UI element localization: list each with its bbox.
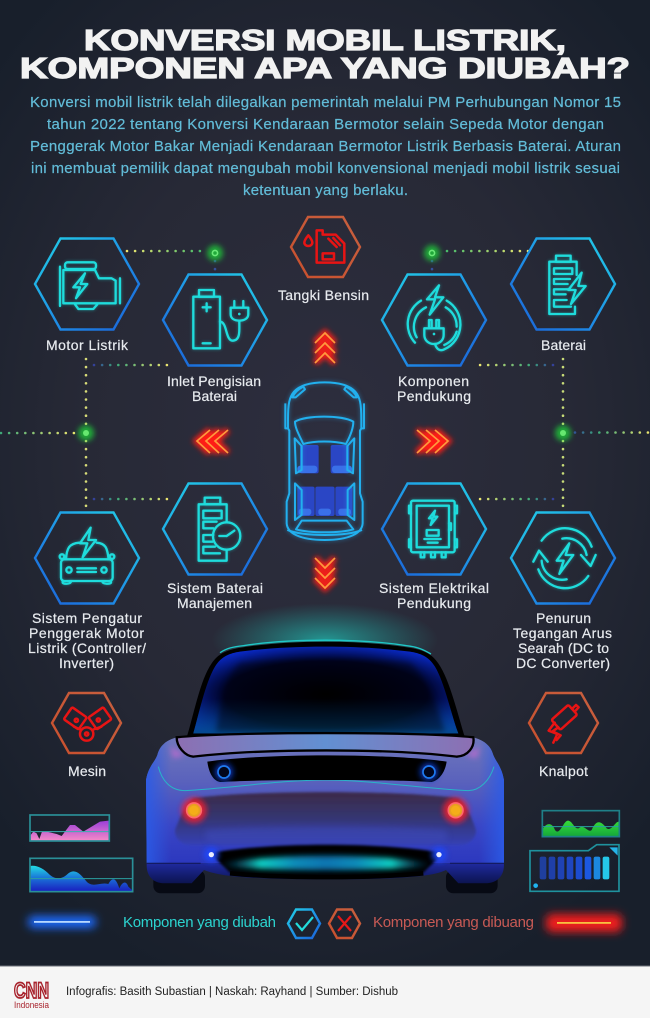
icon: converter arrows bbox=[533, 528, 596, 588]
top-view car outline bbox=[285, 382, 364, 540]
panel: motor listrik bbox=[35, 238, 139, 353]
panel: mesin: Mesin bbox=[68, 763, 106, 779]
legend: red line bbox=[546, 914, 622, 932]
intro paragraph: Penggerak Motor Bakar Menjadi Kendaraan Bermotor Listrik Berbasis Baterai. Aturan bbox=[30, 138, 621, 155]
panel: tangki bensin bbox=[278, 217, 369, 303]
panel: inlet pengisian baterai: Inlet Pengisian bbox=[167, 373, 261, 389]
icon: battery with plug bbox=[193, 290, 248, 348]
rear view electric car bbox=[146, 603, 504, 893]
red tail lights bbox=[181, 798, 468, 823]
arrow: down bbox=[315, 558, 335, 588]
panel: sistem elektrikal pendukung: Pendukung bbox=[397, 595, 471, 611]
panel: baterai bbox=[511, 238, 615, 353]
panel: knalpot bbox=[529, 693, 598, 779]
black band bbox=[207, 755, 447, 782]
title: KONVERSI MOBIL LISTRIK, bbox=[84, 25, 566, 57]
panel: sistem elektrikal pendukung: Sistem Elektrikal bbox=[379, 580, 489, 596]
diffuser with teal glow bbox=[210, 845, 443, 877]
title bbox=[20, 25, 630, 85]
panel: penurun tegangan: Tegangan Arus bbox=[513, 625, 612, 641]
rear panel bbox=[175, 792, 476, 845]
panel lower blue area bbox=[205, 826, 447, 843]
panel: motor listrik: Motor Listrik bbox=[46, 337, 129, 353]
panel: komponen pendukung: Pendukung bbox=[397, 388, 471, 404]
panel: tangki bensin: Tangki Bensin bbox=[278, 287, 369, 303]
CNN Indonesia logo bbox=[14, 978, 50, 1011]
icon: battery with bolt bbox=[549, 256, 586, 314]
arrow: left bbox=[197, 430, 228, 453]
icon: motor bbox=[60, 262, 120, 309]
lower body bbox=[147, 863, 504, 883]
panel: inlet pengisian baterai: Baterai bbox=[192, 388, 237, 404]
title: KOMPONEN APA YANG DIUBAH? bbox=[20, 53, 630, 85]
car body bbox=[146, 737, 504, 863]
roof teal edge bbox=[220, 640, 431, 654]
arrows: red chevrons around car bbox=[197, 333, 448, 588]
connector nodes bbox=[78, 245, 571, 441]
panel: sistem pengatur penggerak motor listrik: Sistem Pengatur bbox=[32, 610, 142, 626]
icon: engine pistons bbox=[64, 707, 112, 741]
icon: plug with bolt bbox=[408, 285, 460, 350]
panel: sistem pengatur penggerak motor listrik bbox=[28, 512, 146, 671]
panel: sistem pengatur penggerak motor listrik: Penggerak Motor bbox=[29, 625, 144, 641]
arrow: up bbox=[315, 333, 335, 363]
wheels shadow bbox=[153, 870, 498, 893]
CNN Indonesia logo: Indonesia bbox=[14, 1000, 50, 1011]
dotted connector lines bbox=[1, 251, 650, 507]
roof and window frame bbox=[187, 642, 465, 737]
intro paragraph: Konversi mobil listrik telah dilegalkan pemerintah melalui PM Perhubungan Nomor 15 bbox=[30, 94, 621, 111]
panel: knalpot: Knalpot bbox=[539, 763, 588, 779]
footer bbox=[0, 966, 650, 1018]
spoiler bbox=[177, 733, 474, 757]
arrow: right bbox=[417, 430, 448, 453]
chart: green area bbox=[542, 811, 619, 837]
icon: car with bolt bbox=[60, 528, 114, 584]
chart: battery level bars bbox=[530, 845, 619, 891]
icon: exhaust bbox=[549, 705, 579, 743]
legend: check hexagon bbox=[288, 910, 320, 938]
intro paragraph: ini membuat pemilik dapat mengubah mobil konvensional menjadi mobil listrik sesuai bbox=[31, 160, 620, 177]
icon: jerry can bbox=[304, 230, 344, 263]
intro paragraph: tahun 2022 tentang Konversi Kendaraan Bermotor selain Sepeda Motor dengan bbox=[47, 116, 604, 133]
bumper crease bbox=[147, 862, 504, 865]
footer: Infografis: Basith Subastian | Naskah: Rayhand | Sumber: Dishub bbox=[66, 986, 398, 998]
intro paragraph: ketentuan yang berlaku. bbox=[243, 182, 408, 199]
panel: sistem elektrikal pendukung bbox=[379, 484, 489, 611]
intro paragraph bbox=[30, 94, 621, 199]
legend: cross hexagon bbox=[329, 910, 360, 938]
panel: penurun tegangan: Penurun bbox=[536, 610, 591, 626]
teal crease line bbox=[158, 767, 494, 791]
panel: baterai: Baterai bbox=[541, 337, 586, 353]
legend: Komponen yang diubah bbox=[123, 914, 276, 931]
chart: cyan area bbox=[30, 858, 133, 892]
panel: sistem pengatur penggerak motor listrik: Inverter) bbox=[59, 655, 114, 671]
icon: electrical cabinet bbox=[409, 501, 457, 557]
panel: inlet pengisian baterai bbox=[163, 274, 267, 404]
panel: mesin bbox=[52, 693, 121, 779]
panel: penurun tegangan bbox=[511, 512, 615, 671]
CNN Indonesia logo: CNN bbox=[14, 978, 49, 1003]
panel: sistem baterai manajemen: Sistem Baterai bbox=[167, 580, 263, 596]
panel: penurun tegangan: Searah (DC to bbox=[518, 640, 609, 656]
icon: battery with gauge bbox=[199, 498, 240, 561]
panel: komponen pendukung bbox=[382, 274, 486, 404]
legend bbox=[28, 910, 622, 938]
panel: komponen pendukung: Komponen bbox=[398, 373, 469, 389]
legend: Komponen yang dibuang bbox=[373, 914, 534, 931]
rear window bbox=[193, 647, 458, 733]
panel: penurun tegangan: DC Converter) bbox=[516, 655, 610, 671]
panel: sistem baterai manajemen: Manajemen bbox=[177, 595, 252, 611]
chart: purple area bbox=[30, 815, 109, 841]
blue lights bbox=[215, 763, 438, 781]
panel: sistem baterai manajemen bbox=[163, 484, 267, 611]
panel: sistem pengatur penggerak motor listrik: Listrik (Controller/ bbox=[28, 640, 146, 656]
legend: blue line bbox=[28, 916, 96, 928]
white-blue marker lights bbox=[204, 847, 446, 862]
roof glow bbox=[212, 603, 438, 677]
